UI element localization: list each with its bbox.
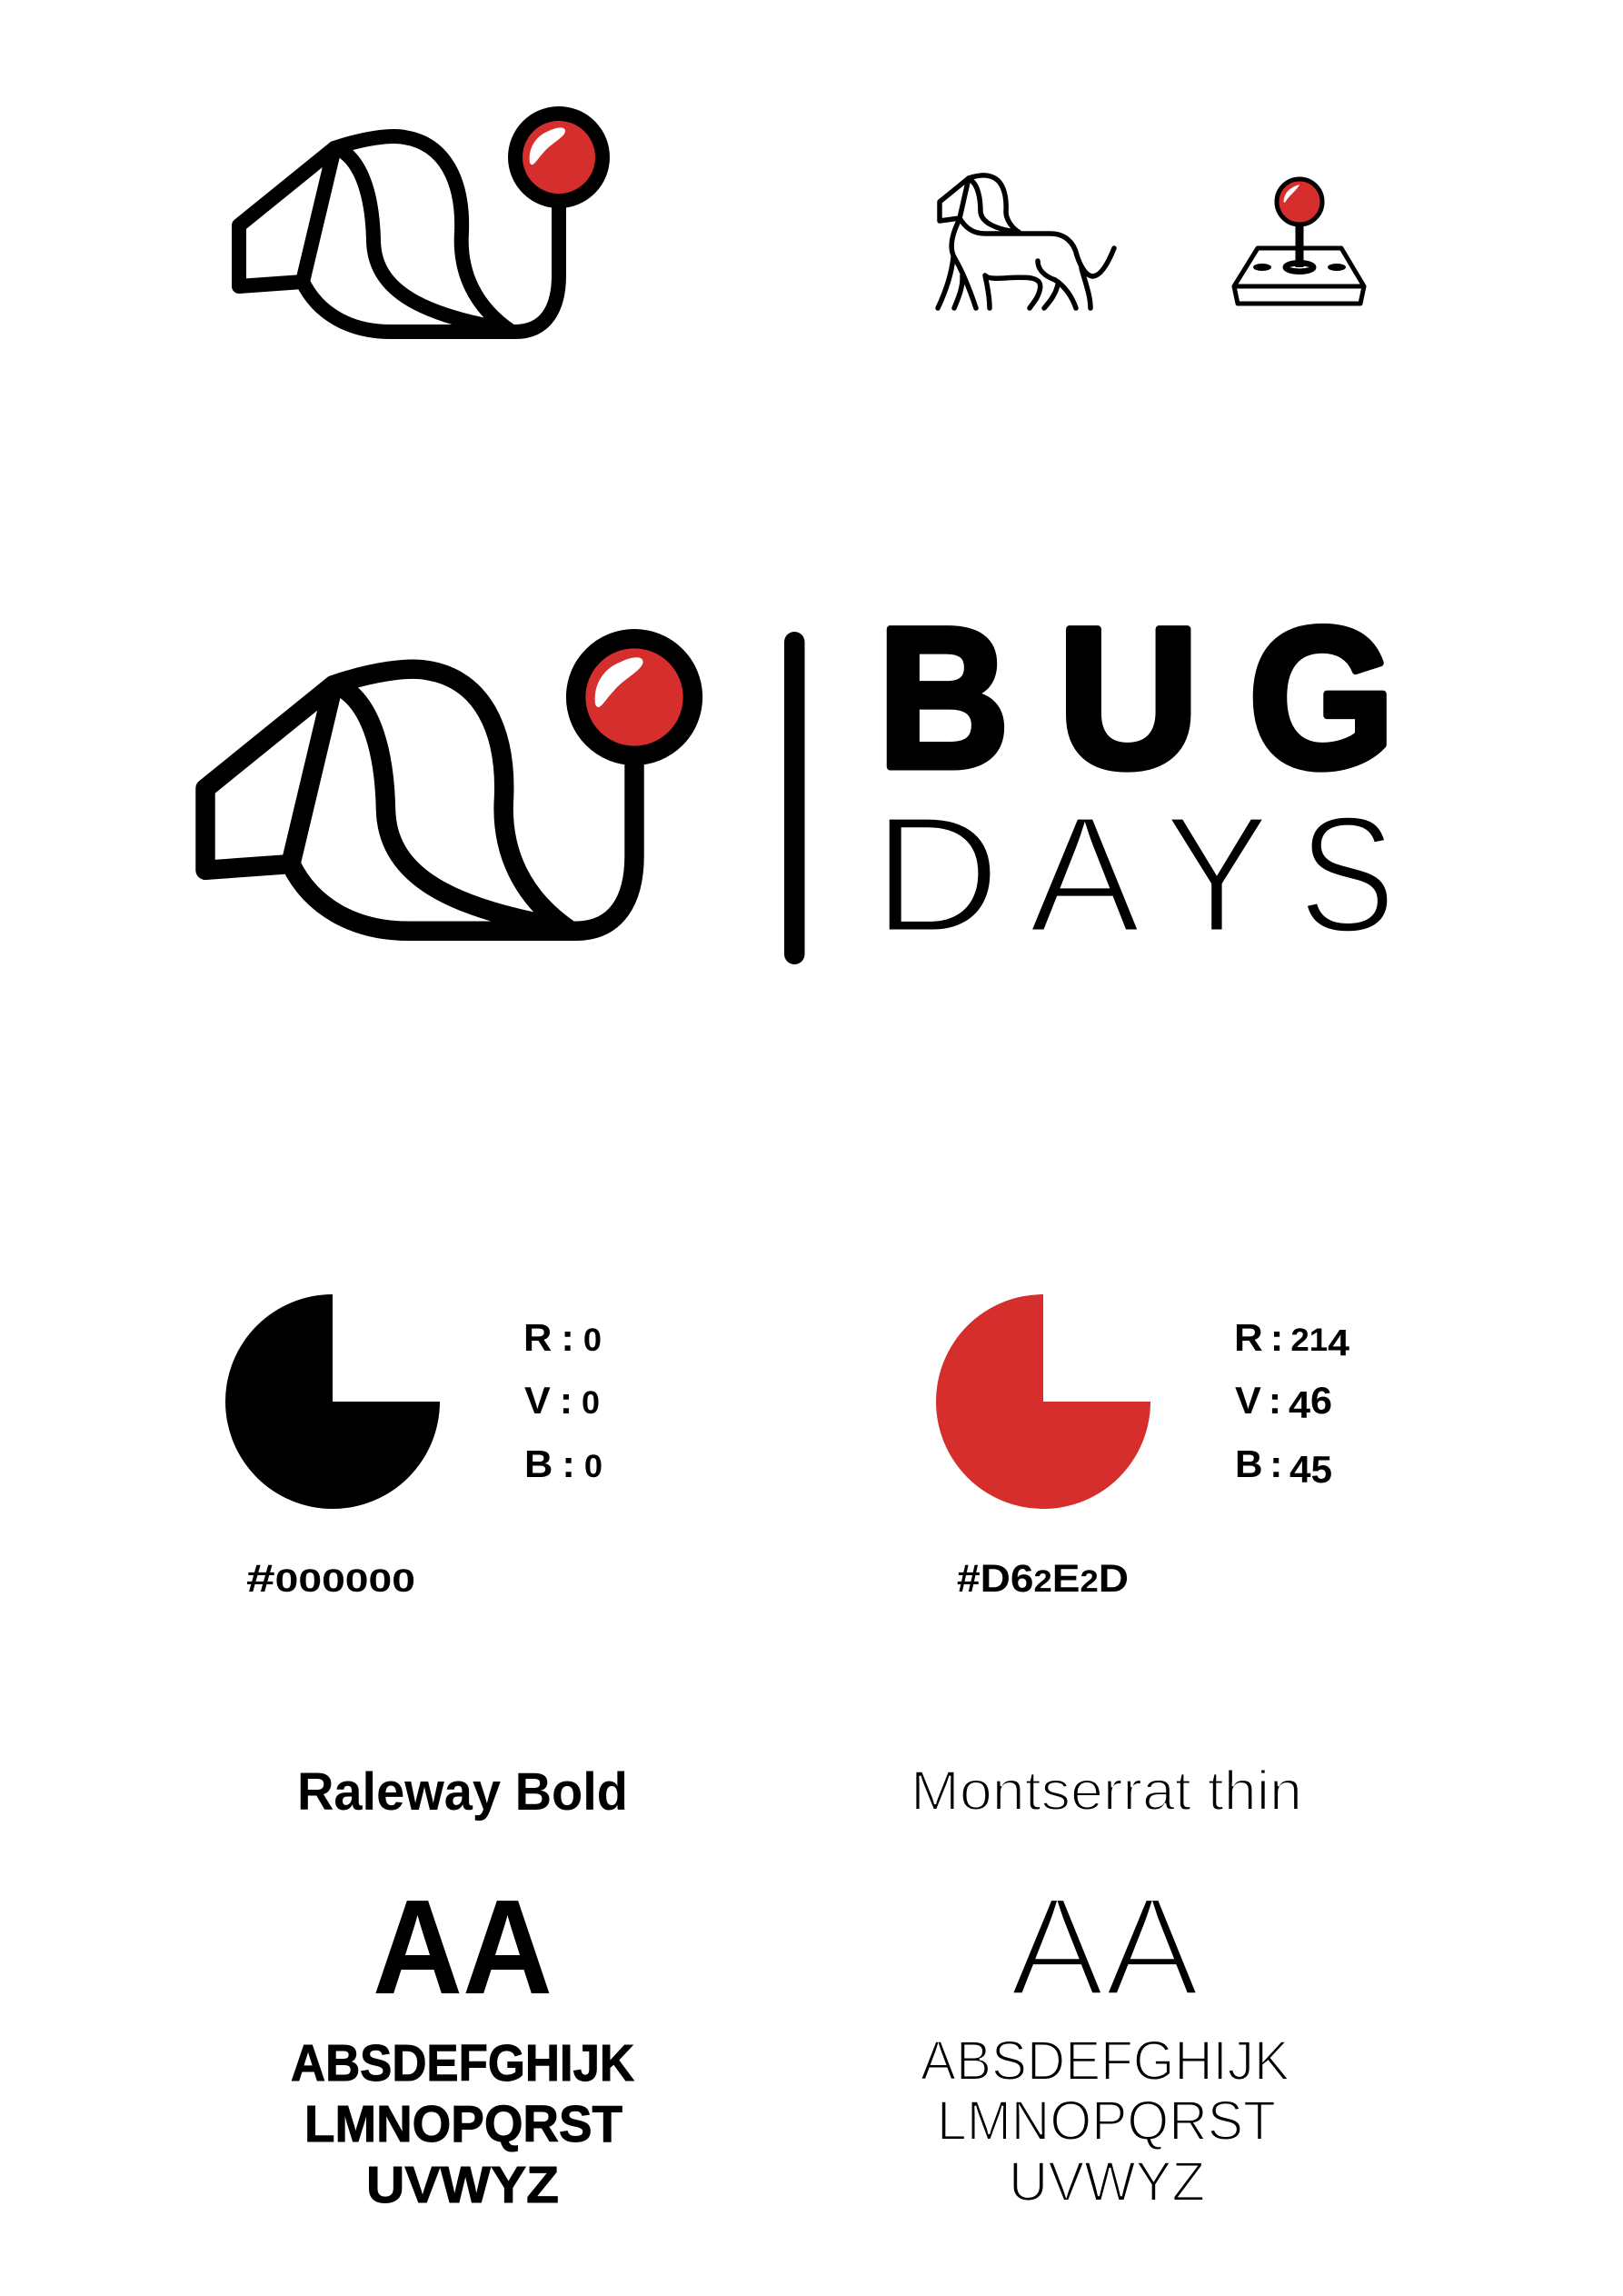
thin alphabet: UVWYZ (1009, 2151, 1205, 2212)
colour values: red RGB (1234, 1316, 1349, 1491)
specimen: thin AA: AA (1010, 1868, 1200, 2025)
wordmark: BUG: B (878, 586, 1010, 810)
thin alphabet: LMNOPQRST (937, 2090, 1276, 2151)
icon: dog line drawing (938, 175, 1114, 308)
typeface name: Montserrat thin: Montserrat thin (911, 1760, 1302, 1822)
colour swatch: black (225, 1294, 440, 1509)
colour values: red RGB: 4 (1328, 1322, 1349, 1363)
wordmark: DAYS: A (1029, 782, 1141, 967)
typeface column: Montserrat thin (911, 1760, 1302, 2212)
thin alphabet: ABSDEFGHIJK (921, 2030, 1289, 2091)
wordmark: DAYS: Y (1164, 781, 1270, 967)
colour code: black hex: #000000 (246, 1557, 415, 1601)
colour values: red RGB: 4 (1289, 1383, 1311, 1426)
wordmark: BUG (878, 586, 1395, 810)
wordmark: DAYS (872, 781, 1396, 968)
colour values: black RGB (523, 1316, 602, 1485)
bold alphabet (291, 2034, 634, 2214)
colour values: black RGB: R : 0 (523, 1316, 602, 1359)
colour code: red hex: #D62E2D (957, 1557, 1129, 1601)
icon: large snail joystick logo (205, 639, 692, 931)
wordmark: DAYS: S (1299, 782, 1396, 967)
wordmark: BUG: U (1058, 587, 1200, 810)
wordmark: DAYS: D (872, 782, 1001, 968)
colour values: red RGB: 6 (1310, 1379, 1332, 1422)
colour values: black RGB: V : 0 (524, 1379, 600, 1422)
logo divider bar (784, 632, 805, 964)
typeface name: Raleway Bold: Raleway Bold (297, 1762, 628, 1822)
typeface column: Raleway Bold (291, 1762, 634, 2214)
thin alphabet (921, 2030, 1289, 2212)
colour swatch: red (936, 1294, 1150, 1509)
colour values: red RGB: V : (1235, 1379, 1280, 1422)
colour values: red RGB: B : (1235, 1442, 1282, 1485)
specimen: bold AA: AA (373, 1872, 553, 2022)
bold alphabet: UVWYZ (366, 2156, 559, 2214)
colour values: red RGB: R : 21 (1234, 1316, 1326, 1359)
bold alphabet: ABSDEFGHIJK (291, 2034, 634, 2092)
wordmark: BUG: G (1249, 587, 1395, 810)
icon: small snail joystick logo (239, 114, 602, 332)
colour values: black RGB: B : 0 (524, 1442, 602, 1485)
bold alphabet: LMNOPQRST (304, 2095, 622, 2153)
colour values: red RGB: 45 (1289, 1448, 1332, 1491)
icon: arcade joystick (1234, 179, 1364, 304)
